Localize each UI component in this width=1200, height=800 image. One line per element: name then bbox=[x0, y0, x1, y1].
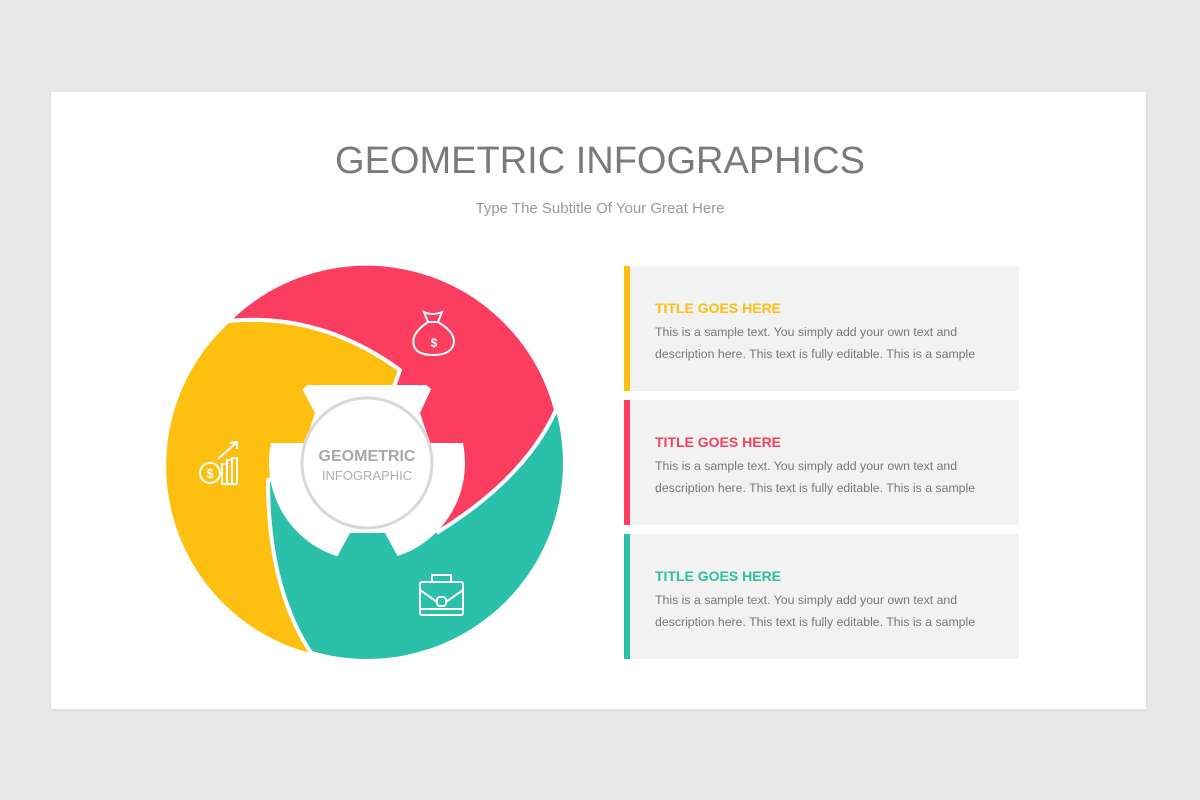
icon: money bag bbox=[413, 312, 454, 355]
icon: growth chart: $ bbox=[206, 466, 214, 481]
center circle label: GEOMETRIC bbox=[319, 448, 416, 465]
icon: growth chart bbox=[200, 442, 237, 484]
panel 1: TITLE GOES HERE bbox=[655, 300, 781, 316]
center circle label bbox=[302, 398, 432, 528]
panel 3: This is a sample text. You simply add your own text and description here. This text is fully editable. This is a sample bbox=[655, 593, 975, 629]
card background bbox=[51, 92, 1146, 709]
panel 2: This is a sample text. You simply add your own text and description here. This text is fully editable. This is a sample bbox=[655, 459, 975, 495]
panel 1: This is a sample text. You simply add your own text and description here. This text is fully editable. This is a sample bbox=[655, 325, 975, 361]
icon: briefcase bbox=[420, 575, 463, 615]
subtitle: Type The Subtitle Of Your Great Here bbox=[475, 200, 725, 217]
icon: money bag: $ bbox=[431, 336, 438, 350]
title: GEOMETRIC INFOGRAPHICS bbox=[335, 140, 865, 182]
center circle label: INFOGRAPHIC bbox=[322, 468, 412, 483]
segment: red bbox=[228, 264, 556, 532]
segment: teal bbox=[171, 267, 563, 659]
panel 3: TITLE GOES HERE bbox=[655, 568, 781, 584]
segment: yellow bbox=[164, 320, 400, 656]
circular chart bbox=[166, 266, 563, 659]
panel 3 bbox=[624, 534, 1019, 659]
panel 2 bbox=[624, 400, 1019, 525]
panel 1 bbox=[624, 266, 1019, 391]
panel 2: TITLE GOES HERE bbox=[655, 434, 781, 450]
center gear bbox=[269, 385, 465, 556]
